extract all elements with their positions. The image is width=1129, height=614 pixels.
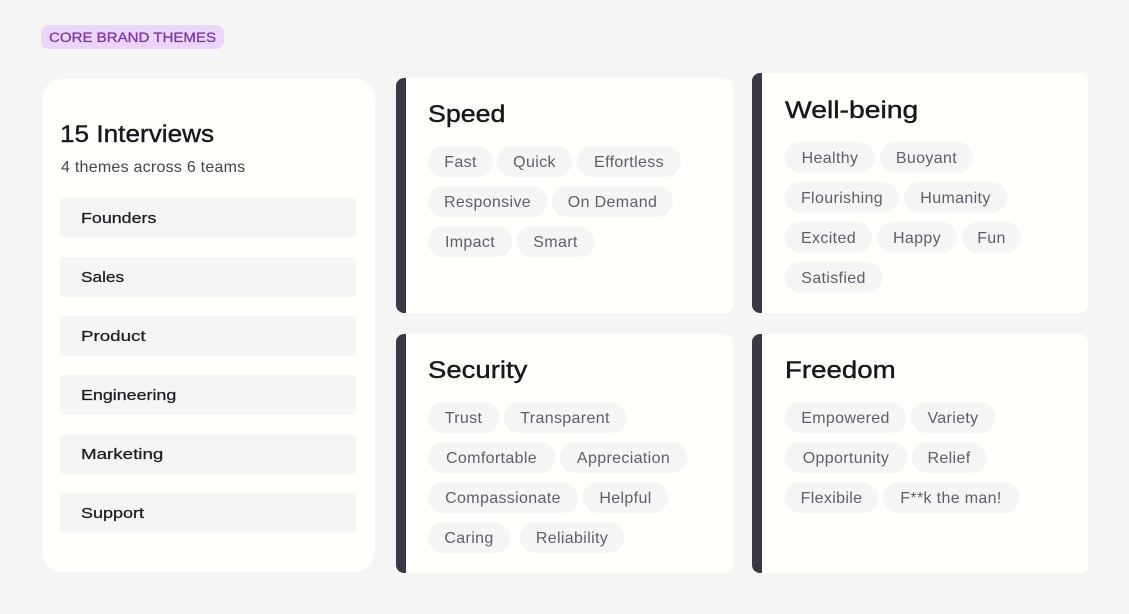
- chip: opportunity: [785, 442, 907, 473]
- chip: appreciation: [560, 442, 687, 473]
- chip: on demand: On Demand: [568, 194, 657, 211]
- team: engineering: Engineering: [81, 387, 176, 404]
- chip: flexibile: Flexibile: [801, 490, 862, 507]
- panel: security: [396, 334, 733, 573]
- chip: helpful: [583, 482, 668, 513]
- chip: impact: [428, 226, 512, 257]
- chip: transparent: [504, 402, 626, 433]
- chip: fast: [428, 146, 493, 177]
- chip: humanity: Humanity: [920, 190, 991, 207]
- chip: satisfied: [785, 262, 882, 293]
- panel: interviews summary: [42, 79, 375, 572]
- chip: opportunity: Opportunity: [803, 450, 889, 467]
- chip: quick: [497, 146, 572, 177]
- chip: flourishing: [785, 182, 899, 213]
- heading: well-being: Well-being: [785, 97, 918, 124]
- team: marketing: [60, 434, 356, 474]
- chip: fun: [962, 222, 1021, 253]
- chip: on demand: [552, 186, 673, 217]
- chip: comfortable: Comfortable: [446, 450, 537, 467]
- team: founders: [60, 198, 356, 238]
- team: support: Support: [81, 505, 144, 522]
- chip: appreciation: Appreciation: [577, 450, 670, 467]
- chip: smart: Smart: [533, 234, 578, 251]
- chip: variety: Variety: [927, 410, 979, 427]
- chip: flexibile: [785, 482, 878, 513]
- chip: excited: Excited: [801, 230, 856, 247]
- chip: responsive: Responsive: [444, 194, 531, 211]
- heading: security: Security: [428, 357, 527, 384]
- team: marketing: Marketing: [81, 446, 163, 463]
- chip: relief: [912, 442, 986, 473]
- chip: buoyant: [880, 142, 973, 173]
- chip: helpful: Helpful: [599, 490, 652, 507]
- chip: empowered: Empowered: [801, 410, 890, 427]
- chip: trust: [428, 402, 499, 433]
- team: sales: [60, 257, 356, 297]
- chip: f**k the man!: F**k the man!: [900, 490, 1002, 507]
- team: sales: Sales: [81, 269, 124, 286]
- text: themes and teams: 4 themes across 6 teams: [61, 159, 246, 176]
- heading: speed: Speed: [428, 101, 505, 128]
- chip: happy: [877, 222, 957, 253]
- chip: trust: Trust: [445, 410, 482, 427]
- chip: reliability: Reliability: [536, 530, 608, 547]
- chip: caring: Caring: [444, 530, 494, 547]
- chip: relief: Relief: [927, 450, 970, 467]
- chip: healthy: [785, 142, 875, 173]
- chip: flourishing: Flourishing: [801, 190, 883, 207]
- chip: responsive: [428, 186, 547, 217]
- chip: happy: Happy: [893, 230, 941, 247]
- chip: excited: [785, 222, 872, 253]
- team: support: [60, 493, 356, 533]
- chip: fast: Fast: [444, 154, 477, 171]
- panel: well-being: [752, 73, 1088, 313]
- chip: effortless: [577, 146, 681, 177]
- chip: comfortable: [428, 442, 555, 473]
- chip: smart: [517, 226, 594, 257]
- tag: core brand themes: [41, 25, 224, 49]
- panel: speed: [396, 78, 733, 313]
- chip: f**k the man!: [883, 482, 1019, 513]
- chip: fun: Fun: [977, 230, 1006, 247]
- chip: compassionate: Compassionate: [445, 490, 561, 507]
- team: product: Product: [81, 328, 146, 345]
- heading: freedom: Freedom: [785, 357, 896, 384]
- chip: empowered: [785, 402, 906, 433]
- chip: caring: [428, 522, 510, 553]
- team: founders: Founders: [81, 210, 156, 227]
- chip: effortless: Effortless: [594, 154, 664, 171]
- chip: quick: Quick: [513, 154, 556, 171]
- tag: core brand themes: CORE BRAND THEMES: [49, 30, 216, 45]
- chip: transparent: Transparent: [520, 410, 610, 427]
- chip: impact: Impact: [445, 234, 495, 251]
- chip: buoyant: Buoyant: [896, 150, 957, 167]
- chip: healthy: Healthy: [802, 150, 858, 167]
- chip: reliability: [520, 522, 624, 553]
- panel: freedom: [752, 334, 1088, 573]
- chip: satisfied: Satisfied: [801, 270, 866, 287]
- chip: compassionate: [428, 482, 578, 513]
- team: engineering: [60, 375, 356, 415]
- team: product: [60, 316, 356, 356]
- chip: humanity: [904, 182, 1007, 213]
- heading: 15 interviews: 15 Interviews: [60, 121, 214, 148]
- chip: variety: [911, 402, 995, 433]
